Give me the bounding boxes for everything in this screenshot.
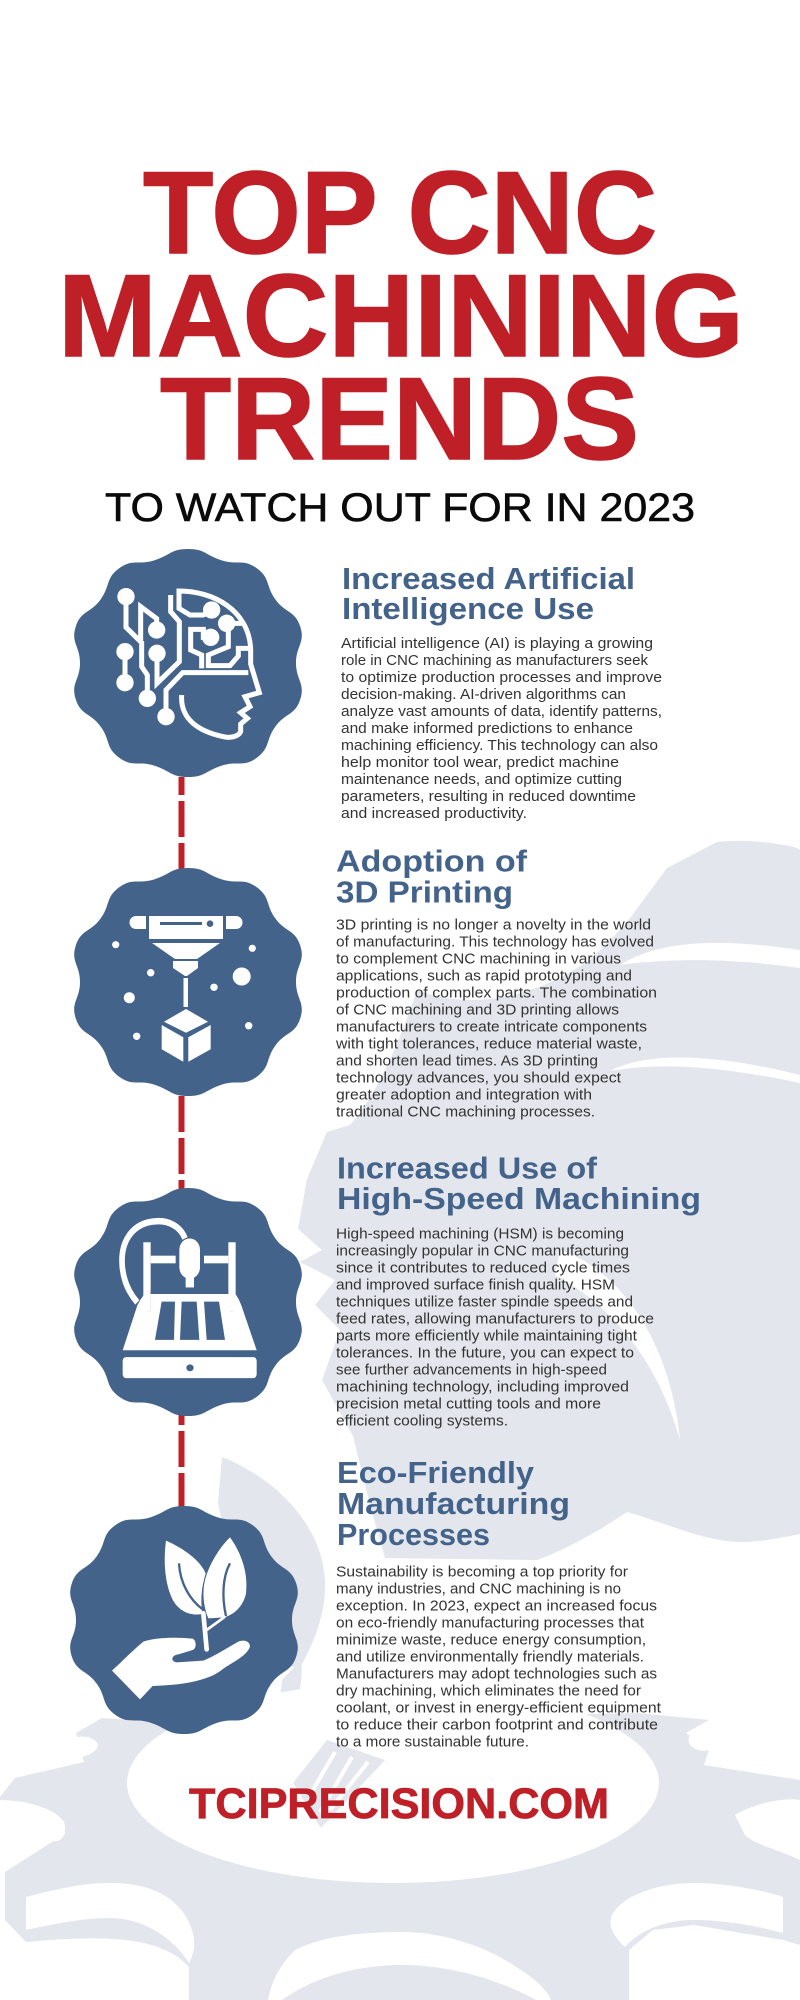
section 2 heading (336, 844, 528, 910)
icon: 3D printer nozzle and cube (112, 916, 256, 1062)
section 3 heading: High-Speed Machining (337, 1181, 701, 1216)
section 4 body text: to reduce their carbon footprint and contribute (336, 1717, 658, 1734)
section 4 heading: Eco-Friendly (337, 1455, 535, 1490)
section 4 body text: to a more sustainable future. (336, 1734, 529, 1751)
section 4 heading: Manufacturing (337, 1486, 570, 1521)
section 4 body text: and utilize environmentally friendly materials. (336, 1649, 644, 1666)
section 4 body text: exception. In 2023, expect an increased focus (336, 1598, 657, 1615)
dashed connector 2 (178, 1096, 184, 1189)
icon: AI circuit head (116, 588, 259, 737)
section 4 body text: coolant, or invest in energy-efficient equipment (336, 1700, 662, 1717)
section 3 body text: see further advancements in high-speed (336, 1361, 607, 1378)
dashed connector 3 (178, 1414, 184, 1508)
section 3 body text: and improved surface finish quality. HSM (336, 1276, 615, 1293)
section 4 body text: minimize waste, reduce energy consumption, (336, 1632, 646, 1649)
section 1 body text: help monitor tool wear, predict machine (341, 754, 619, 771)
section 4 body text: Manufacturers may adopt technologies such as (336, 1666, 657, 1683)
dashed connector 1 (178, 777, 184, 870)
footer website: TCIPRECISION.COM (189, 1780, 609, 1828)
icon: CNC machine (122, 1221, 257, 1378)
section 3 body text: techniques utilize faster spindle speeds and (336, 1293, 633, 1310)
section 2 body text: applications, such as rapid prototyping and (336, 967, 632, 984)
badge: AI head (74, 549, 302, 777)
section 2 body text: to complement CNC machining in various (336, 950, 621, 967)
section 2 body text: and shorten lead times. As 3D printing (336, 1052, 598, 1069)
section 3 body text: High-speed machining (HSM) is becoming (336, 1225, 624, 1242)
section 1 body text: and increased productivity. (341, 805, 527, 822)
subtitle: TO WATCH OUT FOR IN 2023 (105, 486, 695, 530)
badge: 3D printer (74, 868, 302, 1096)
section 1 body text: and make informed predictions to enhance (341, 720, 633, 737)
title: TRENDS (160, 353, 639, 484)
section 3 body text: tolerances. In the future, you can expect to (336, 1344, 634, 1361)
section 2 body text: 3D printing is no longer a novelty in the world (336, 916, 651, 933)
section 2 heading: 3D Printing (336, 874, 513, 910)
section 3 body text: parts more efficiently while maintaining tight (336, 1327, 638, 1344)
section 1 body text: Artificial intelligence (AI) is playing a growing (341, 635, 653, 652)
section 1 body text (341, 635, 662, 822)
section 1 body text: decision-making. AI-driven algorithms can (341, 686, 626, 703)
section 3 heading: Increased Use of (337, 1150, 598, 1186)
section 2 heading: Adoption of (336, 844, 528, 878)
section 2 body text: production of complex parts. The combination (336, 984, 657, 1001)
section 4 body text: on eco-friendly manufacturing processes that (336, 1615, 645, 1632)
section 2 body text: technology advances, you should expect (336, 1069, 622, 1086)
section 3 heading (337, 1150, 701, 1216)
section 3 body text: feed rates, allowing manufacturers to produce (336, 1310, 654, 1327)
section 3 body text: increasingly popular in CNC manufacturing (336, 1242, 629, 1259)
section 1 body text: machining efficiency. This technology can also (341, 737, 658, 754)
section 4 body text: Sustainability is becoming a top priority for (336, 1564, 628, 1581)
section 1 body text: to optimize production processes and improve (341, 669, 662, 686)
section 2 body text: with tight tolerances, reduce material waste, (335, 1035, 642, 1052)
section 3 body text (336, 1225, 654, 1429)
icon: plant in hand (112, 1537, 250, 1699)
section 2 body text (335, 916, 657, 1120)
title (58, 147, 744, 484)
section 4 body text: dry machining, which eliminates the need for (336, 1683, 641, 1700)
background: machinist and gear watermark (0, 841, 800, 2000)
section 1 heading: Increased Artificial (342, 561, 635, 596)
section 2 body text: traditional CNC machining processes. (336, 1103, 595, 1120)
badge: CNC machine (74, 1188, 302, 1416)
section 3 body text: efficient cooling systems. (336, 1412, 508, 1429)
section 2 body text: of manufacturing. This technology has evolved (336, 933, 654, 950)
section 3 body text: since it contributes to reduced cycle times (336, 1259, 630, 1276)
section 4 heading (337, 1455, 570, 1552)
badge: eco plant (70, 1506, 298, 1734)
section 4 body text (336, 1564, 662, 1751)
section 1 heading: Intelligence Use (342, 591, 594, 626)
section 1 body text: role in CNC machining as manufacturers seek (341, 652, 648, 669)
section 4 body text: many industries, and CNC machining is no (336, 1581, 621, 1598)
section 1 heading (342, 561, 635, 626)
title: MACHINING (58, 250, 744, 381)
section 3 body text: machining technology, including improved (336, 1378, 629, 1395)
section 2 body text: of CNC machining and 3D printing allows (336, 1001, 619, 1018)
title: TOP CNC (143, 147, 657, 278)
section 4 heading: Processes (337, 1517, 490, 1552)
section 2 body text: greater adoption and integration with (336, 1086, 592, 1103)
section 2 body text: manufacturers to create intricate components (336, 1018, 647, 1035)
section 3 body text: precision metal cutting tools and more (336, 1395, 601, 1412)
section 1 body text: parameters, resulting in reduced downtime (341, 788, 636, 805)
section 1 body text: analyze vast amounts of data, identify patterns, (341, 703, 662, 720)
section 1 body text: maintenance needs, and optimize cutting (341, 771, 622, 788)
